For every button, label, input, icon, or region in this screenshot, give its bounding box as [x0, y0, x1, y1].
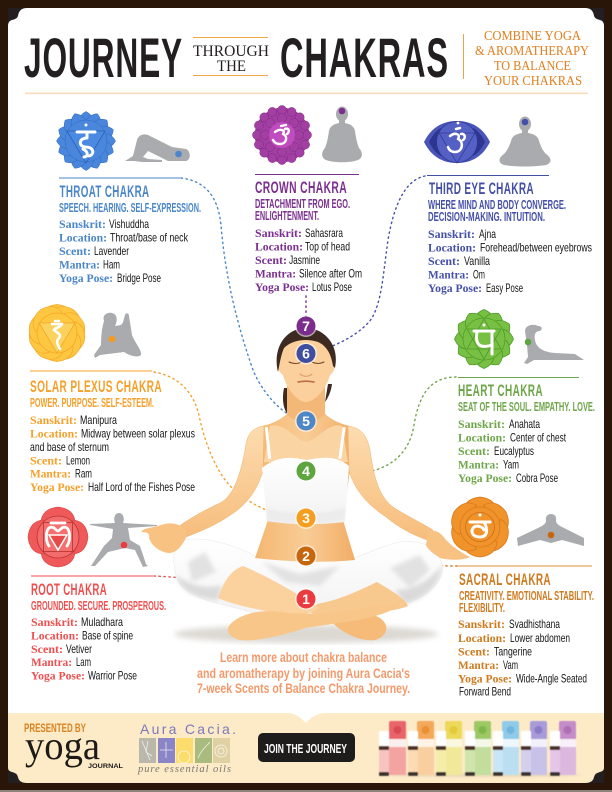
right arm	[348, 426, 433, 541]
icon: root mandala	[28, 507, 88, 567]
details: Ajna	[479, 227, 496, 241]
details: Location:	[458, 633, 506, 645]
details: Location:	[255, 242, 303, 254]
details	[30, 413, 195, 494]
tagline	[459, 589, 594, 615]
details: Sanskrit:	[59, 219, 106, 231]
call to action text: and aromatherapy by joining Aura Cacia's	[197, 666, 410, 681]
chakra point 7: 7	[302, 318, 310, 334]
details: Eucalyptus	[494, 444, 534, 458]
tagline: POWER. PURPOSE. SELF-ESTEEM.	[30, 396, 154, 410]
button: join the journey	[258, 733, 355, 762]
icon: bridge pose	[125, 134, 190, 162]
details: Lotus Pose	[312, 280, 352, 294]
details: Muladhara	[81, 615, 123, 629]
torso	[250, 405, 362, 562]
details: Scent:	[30, 456, 62, 468]
details: Scent:	[59, 246, 91, 258]
heading: Chakras: CHAKRAS	[280, 26, 449, 89]
panel: crown chakra	[252, 106, 362, 294]
heading: CROWN CHAKRA	[255, 178, 347, 197]
details: Location:	[428, 242, 476, 254]
presented by: PRESENTED BY	[24, 721, 86, 735]
details: Warrior Pose	[88, 668, 137, 682]
tagline: FLEXIBILITY.	[459, 601, 505, 615]
facial features	[289, 362, 324, 382]
details: Yoga Pose:	[255, 282, 309, 294]
details	[59, 217, 189, 285]
logo: yoga journal: JOURNAL	[88, 764, 123, 770]
tagline: DETACHMENT FROM EGO.	[255, 197, 350, 211]
crossed legs and feet	[218, 566, 408, 640]
icon: half lord of the fishes pose	[94, 313, 141, 358]
details: Sanskrit:	[255, 228, 302, 240]
icon: wide-angle forward bend	[517, 514, 584, 546]
details: Tangerine	[494, 644, 532, 658]
chakra point 1	[295, 588, 317, 610]
details: Cobra Pose	[516, 471, 558, 485]
icon: third eye mandala	[424, 121, 490, 163]
heading: THIRD EYE CHAKRA	[429, 179, 534, 198]
details: Top of head	[305, 240, 350, 254]
neck	[287, 385, 325, 422]
heading: SACRAL CHAKRA	[459, 570, 551, 589]
chakra point 2	[295, 545, 317, 567]
chakra point 3	[295, 507, 317, 529]
tagline: TO BALANCE	[494, 59, 571, 74]
tagline: ENLIGHTENMENT.	[255, 209, 319, 223]
heading: through the: THROUGH	[193, 43, 269, 60]
details: Half Lord of the Fishes Pose	[88, 480, 195, 494]
details: Lam	[76, 655, 91, 669]
illustration: meditating woman	[141, 328, 470, 643]
details: Yoga Pose:	[458, 674, 512, 686]
heading: SOLAR PLEXUS CHAKRA	[30, 377, 162, 396]
tagline: GROUNDED. SECURE. PROSPEROUS.	[31, 599, 166, 613]
tubes	[389, 721, 576, 775]
tagline	[255, 197, 350, 223]
panel: sacral chakra	[446, 497, 594, 698]
details: Scent:	[31, 644, 63, 656]
heading: ROOT CHAKRA	[31, 580, 107, 599]
details: Throat/base of neck	[110, 230, 189, 244]
details: Mantra:	[255, 268, 296, 280]
ground shadow	[174, 625, 438, 643]
details: Yam	[503, 458, 519, 472]
title	[24, 26, 449, 89]
tagline: YOUR CHAKRAS	[484, 74, 582, 89]
details: Location:	[30, 428, 78, 440]
heading: THROAT CHAKRA	[60, 182, 150, 201]
details: Location:	[458, 432, 506, 444]
details: Svadhisthana	[509, 617, 560, 631]
details: Vetiver	[66, 642, 92, 656]
details: Yoga Pose:	[30, 482, 84, 494]
heading: Journey: JOURNEY	[24, 26, 183, 89]
details: Yoga Pose:	[428, 283, 482, 295]
right hand	[426, 531, 470, 560]
dotted connectors	[154, 176, 458, 597]
heading: HEART CHAKRA	[458, 381, 543, 400]
chakra point 4	[295, 460, 317, 482]
details: Location:	[59, 232, 107, 244]
details: Lower abdomen	[510, 631, 570, 645]
details: Vam	[503, 658, 518, 672]
chakra point 4: 4	[302, 463, 310, 479]
left arm	[178, 426, 264, 538]
product row: essential oils	[379, 721, 582, 777]
left hand	[141, 523, 186, 553]
details	[255, 226, 362, 294]
panel: solar plexus chakra	[25, 300, 195, 494]
details: Jasmine	[289, 253, 320, 267]
white top	[262, 427, 349, 524]
details: Mantra:	[30, 468, 71, 480]
icon: cobra pose	[524, 325, 584, 364]
pants	[174, 539, 442, 625]
details: Forward Bend	[459, 684, 511, 698]
details: Ram	[75, 466, 92, 480]
details: Center of chest	[510, 430, 566, 444]
logo: aura cacia: Aura Cacia.	[140, 721, 236, 737]
details: Mantra:	[428, 270, 469, 282]
panel: third eye chakra	[424, 116, 592, 295]
details: Yoga Pose:	[59, 273, 113, 285]
details: Silence after Om	[299, 266, 362, 280]
chakra point 6	[295, 342, 317, 364]
details: Om	[473, 268, 485, 282]
panel: throat chakra	[56, 111, 201, 285]
details: Sanskrit:	[458, 419, 505, 431]
tagline: DECISION-MAKING. INTUITION.	[428, 210, 545, 224]
bottles	[379, 731, 560, 776]
details: Yoga Pose:	[458, 473, 512, 485]
details: and base of sternum	[30, 440, 109, 454]
details: Lavender	[94, 244, 129, 258]
panel: heart chakra	[453, 308, 595, 485]
tagline: COMBINE YOGA	[484, 29, 582, 44]
details: Sanskrit:	[30, 415, 77, 427]
details: Yoga Pose:	[31, 670, 85, 682]
details: Scent:	[428, 256, 460, 268]
details	[458, 417, 566, 485]
face	[277, 338, 336, 402]
details: Mantra:	[458, 460, 499, 472]
details: Location:	[31, 630, 79, 642]
details: Manipura	[80, 413, 117, 427]
details	[428, 227, 592, 295]
details: Easy Pose	[486, 281, 523, 295]
details: Mantra:	[31, 657, 72, 669]
icon: lotus pose	[322, 106, 362, 162]
details: Vishuddha	[109, 217, 149, 231]
details: Base of spine	[82, 628, 133, 642]
heading: through the: THE	[217, 58, 246, 75]
details: Sanskrit:	[458, 619, 505, 631]
chakra point 5	[295, 410, 317, 432]
details	[31, 615, 137, 682]
call to action text	[197, 650, 410, 696]
logo: yoga journal: yoga	[25, 723, 100, 768]
details: Mantra:	[458, 660, 499, 672]
icon: solar plexus mandala	[25, 300, 89, 366]
logo: aura cacia	[137, 721, 236, 775]
icon: heart mandala	[453, 308, 515, 370]
chakra point 1: 1	[302, 591, 310, 607]
tagline: & AROMATHERAPY	[475, 44, 589, 59]
details: Sanskrit:	[428, 229, 475, 241]
call to action text: 7-week Scents of Balance Chakra Journey.	[197, 681, 410, 696]
heading: through the	[193, 37, 269, 76]
chakra point 6: 6	[302, 346, 310, 362]
details: Sahasrara	[305, 226, 343, 240]
footer band	[8, 713, 604, 783]
icon: crown mandala	[252, 106, 312, 164]
tagline: SPEECH. HEARING. SELF-EXPRESSION.	[59, 201, 201, 215]
details: Ham	[103, 258, 120, 272]
panel: root chakra	[28, 507, 166, 682]
ponytail and hair back	[283, 384, 332, 413]
chakra point 5: 5	[302, 413, 310, 429]
tagline	[428, 198, 566, 224]
details: Lemon	[66, 454, 90, 468]
details: Sanskrit:	[31, 617, 78, 629]
details: Midway between solar plexus	[81, 426, 195, 440]
logo: aura cacia: pure essential oils	[137, 764, 231, 775]
details: Scent:	[255, 255, 287, 267]
icon: warrior pose	[90, 513, 157, 567]
hair	[277, 328, 336, 372]
details: Anahata	[509, 417, 540, 431]
details: Scent:	[458, 446, 490, 458]
icon: throat mandala	[56, 111, 116, 171]
chakra point 2: 2	[302, 548, 310, 564]
details	[458, 617, 587, 698]
button: join the journey: JOIN THE JOURNEY	[264, 741, 347, 756]
chakra point 3: 3	[302, 510, 310, 526]
call to action text: Learn more about chakra balance	[220, 650, 387, 665]
details: Vanilla	[464, 254, 490, 268]
details: Mantra:	[59, 260, 100, 272]
tagline	[463, 29, 589, 89]
icon: easy pose	[500, 116, 550, 166]
icon: sacral mandala	[446, 497, 514, 557]
details: Bridge Pose	[117, 271, 161, 285]
chakra point 7	[295, 315, 317, 337]
details: Scent:	[458, 646, 490, 658]
